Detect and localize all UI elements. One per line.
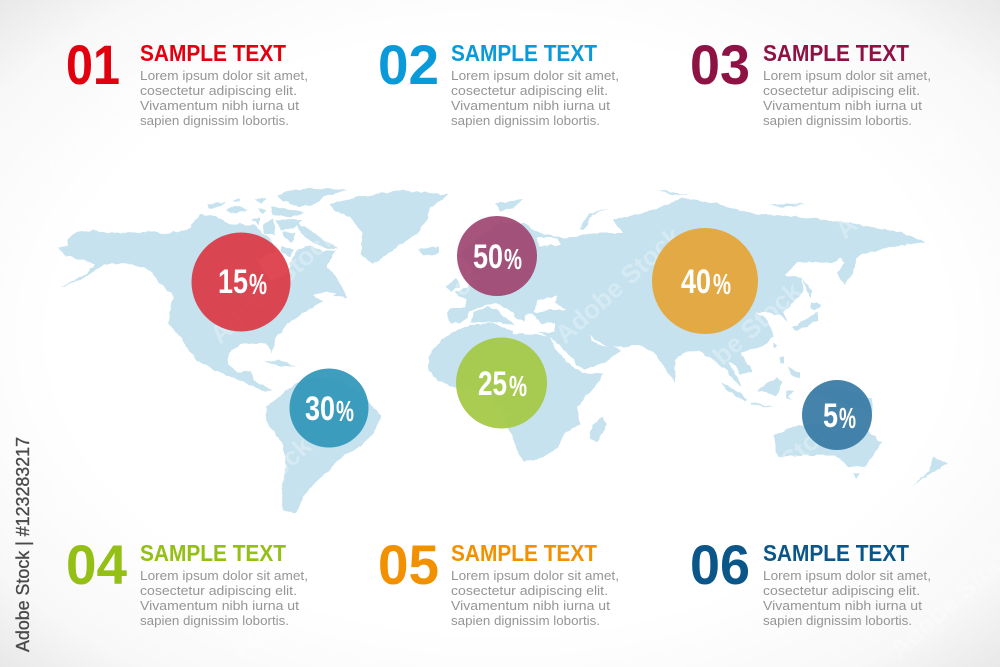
block 03: cosectetur adipiscing elit. [763,83,920,98]
block 01: Lorem ipsum dolor sit amet, [140,68,308,83]
watermark text: Adobe Stock [369,60,508,189]
world map [58,188,948,513]
bubble: 40%: 40 [681,263,711,301]
block 01 [66,33,308,128]
block 02: sapien dignissim lobortis. [451,113,600,128]
block 04: sapien dignissim lobortis. [140,613,289,628]
watermark text: Adobe Stock [0,260,138,389]
block 06: sapien dignissim lobortis. [763,613,912,628]
map: Japan, Southeast Asia and Oceania [720,278,872,412]
bubble: 25%: 25 [478,365,507,403]
watermark text: Adobe Stock [179,430,318,559]
map: islands of Europe and the Arctic [420,190,806,292]
Persian Gulf cut-out [589,335,608,347]
watermark text: Adobe Stock [224,535,363,664]
block 04: Lorem ipsum dolor sit amet, [140,568,308,583]
block 02 [378,33,619,128]
block 04: SAMPLE TEXT [140,540,286,566]
block 04: 04 [66,533,127,596]
block 05: sapien dignissim lobortis. [451,613,600,628]
watermark text: Adobe Stock [44,385,183,514]
watermark text: Adobe Stock [379,395,518,524]
block 03 [690,33,931,128]
watermark text: Adobe Stock [699,60,838,189]
block 01: cosectetur adipiscing elit. [140,83,297,98]
bubble: 30%: 30 [305,390,335,428]
watermark text: Adobe Stock [549,220,688,349]
block 05: Vivamentum nibh iurna ut [451,598,610,613]
block 01: sapien dignissim lobortis. [140,113,289,128]
bubble: 25%: % [509,371,527,403]
Mediterranean cut-out [456,303,555,334]
bubble: 5%: % [839,403,856,435]
Red Sea cut-out [548,337,581,369]
bubble: 40% [652,228,758,334]
block 03: 03 [690,33,750,96]
watermark text: Adobe Stock [829,115,968,244]
block 05 [378,533,619,628]
watermark text: Adobe Stock [349,260,488,389]
Baltic cut-out [537,237,561,246]
Hudson Bay cut-out [257,252,291,280]
block 02: 02 [378,33,439,96]
bubble: 40%: % [713,269,731,301]
block 04: cosectetur adipiscing elit. [140,583,297,598]
Black Sea cut-out [534,296,567,313]
block 06 [690,533,931,628]
bubble: 30%: % [336,396,354,428]
watermark text: Adobe Stock [404,535,543,664]
map: Americas and Greenland [58,190,448,513]
block 05: Lorem ipsum dolor sit amet, [451,568,619,583]
block 02: SAMPLE TEXT [451,40,597,66]
block 02: cosectetur adipiscing elit. [451,83,608,98]
watermark text: Adobe Stock [509,100,648,229]
bubble: 15%: 15 [218,263,248,301]
bubble: 50%: % [504,244,522,276]
block 02: Vivamentum nibh iurna ut [451,98,610,113]
block 05: SAMPLE TEXT [451,540,597,566]
block 02: Lorem ipsum dolor sit amet, [451,68,619,83]
block 01: SAMPLE TEXT [140,40,286,66]
block 04 [66,533,308,628]
watermark text: Adobe Stock [709,405,848,534]
bubble: 15%: % [249,269,267,301]
map: Eurasia [447,198,925,387]
map: Canadian Arctic islands [190,188,347,257]
block 03: Lorem ipsum dolor sit amet, [763,68,931,83]
bubble: 25% [456,338,547,428]
block 06: cosectetur adipiscing elit. [763,583,920,598]
stock id label: Adobe Stock | #123283217 [13,437,33,652]
watermark text: Adobe Stock [39,55,178,184]
block 03: SAMPLE TEXT [763,40,909,66]
watermark text: Adobe Stock [564,535,703,664]
bubble: 50%: 50 [473,238,503,276]
block 05: 05 [378,533,439,596]
bubble: 15% [192,232,290,332]
bubble: 50% [457,216,537,296]
watermark text: Adobe Stock [164,100,303,229]
block 06: Vivamentum nibh iurna ut [763,598,922,613]
block 05: cosectetur adipiscing elit. [451,583,608,598]
block 06: SAMPLE TEXT [763,540,909,566]
block 03: sapien dignissim lobortis. [763,113,912,128]
block 01: Vivamentum nibh iurna ut [140,98,299,113]
watermark text: Adobe Stock [204,220,343,349]
bubble: 5% [802,380,872,450]
block 06: 06 [690,533,750,596]
map: Africa [429,323,607,462]
block 01: 01 [66,33,120,96]
bubble: 5%: 5 [823,397,838,435]
watermark text: Adobe Stock [669,275,808,404]
block 04: Vivamentum nibh iurna ut [140,598,299,613]
block 06: Lorem ipsum dolor sit amet, [763,568,931,583]
bubble: 30% [290,368,368,448]
block 03: Vivamentum nibh iurna ut [763,98,922,113]
watermark text: Adobe Stock [529,410,668,539]
